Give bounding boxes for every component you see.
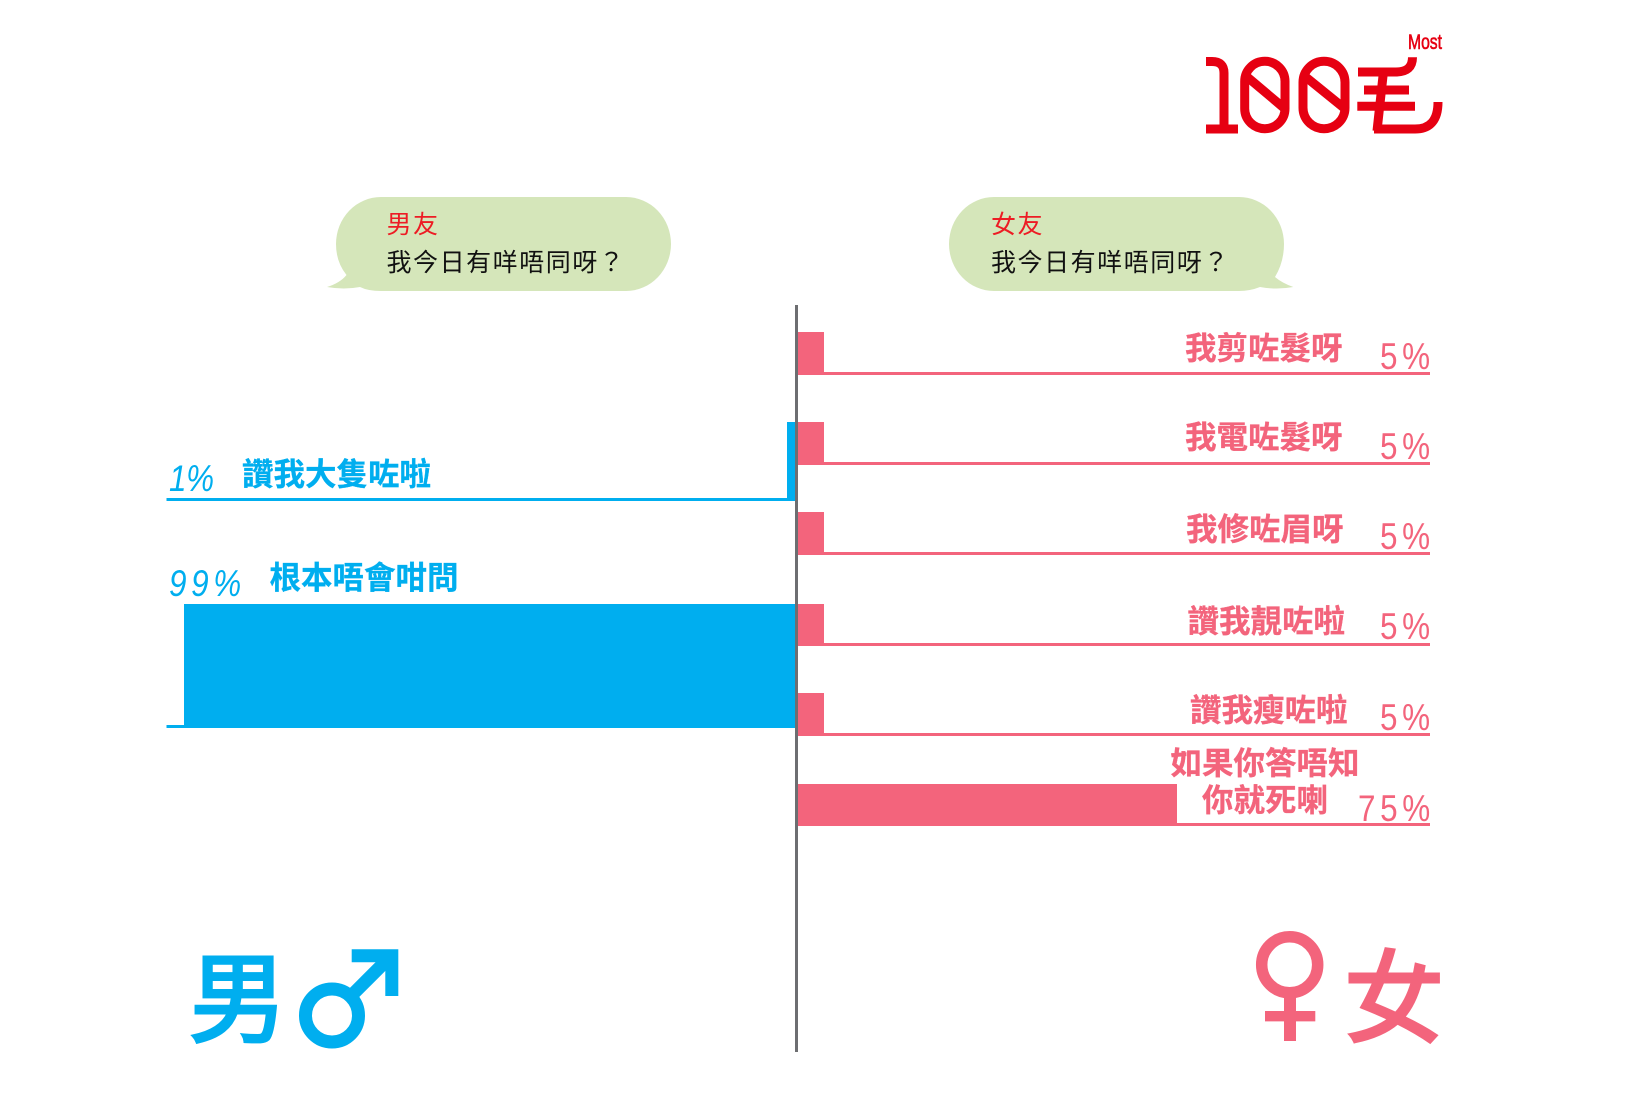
speech bubble: boyfriend <box>327 197 671 291</box>
female chart: row 1 <box>796 330 1430 378</box>
percentage: 5% <box>1380 698 1430 739</box>
icon: male symbol <box>306 956 392 1042</box>
icon: female symbol <box>1262 937 1318 1041</box>
label: 我電咗髮呀 <box>1185 419 1343 455</box>
central axis <box>795 305 798 1052</box>
female chart: row 3 <box>796 511 1430 558</box>
bubble heading: 女友: 女友 <box>991 211 1044 239</box>
label line 1: 如果你答唔知 <box>1170 745 1360 781</box>
percentage: 5% <box>1380 337 1430 378</box>
speech bubble: girlfriend <box>949 197 1293 291</box>
label: 讚我大隻咗啦 <box>242 456 431 492</box>
label line 2: 你就死喇 <box>1202 782 1328 818</box>
female chart: row 5 <box>796 692 1430 739</box>
male chart: 1% row <box>166 422 796 501</box>
female chart: row 4 <box>796 603 1430 648</box>
label: 我修咗眉呀 <box>1186 511 1344 547</box>
label: 讚我瘦咗啦 <box>1190 692 1348 728</box>
percentage: 5% <box>1380 607 1430 648</box>
percentage 99%: 99% <box>169 564 241 605</box>
male heading: 男: 男 <box>189 945 287 1055</box>
bubble question: 我今日有咩唔同呀？ <box>991 249 1230 277</box>
logo: 100毛 Most <box>1206 31 1442 131</box>
female heading: 女: 女 <box>1344 944 1444 1056</box>
label: 讚我靚咗啦 <box>1188 603 1345 639</box>
bubble heading: 男友: 男友 <box>386 211 440 239</box>
label: 根本唔會咁問 <box>270 560 459 596</box>
percentage 75%: 75% <box>1358 789 1430 830</box>
logo word: Most: Most <box>1408 31 1442 54</box>
female chart: row 6 <box>796 745 1430 830</box>
male chart: 99% row <box>166 560 796 728</box>
percentage: 5% <box>1380 517 1430 558</box>
female chart: row 2 <box>796 419 1430 468</box>
label: 我剪咗髮呀 <box>1185 330 1343 366</box>
bubble question: 我今日有咩唔同呀？ <box>386 249 625 277</box>
percentage 1%: 1% <box>169 459 214 500</box>
percentage: 5% <box>1380 427 1430 468</box>
